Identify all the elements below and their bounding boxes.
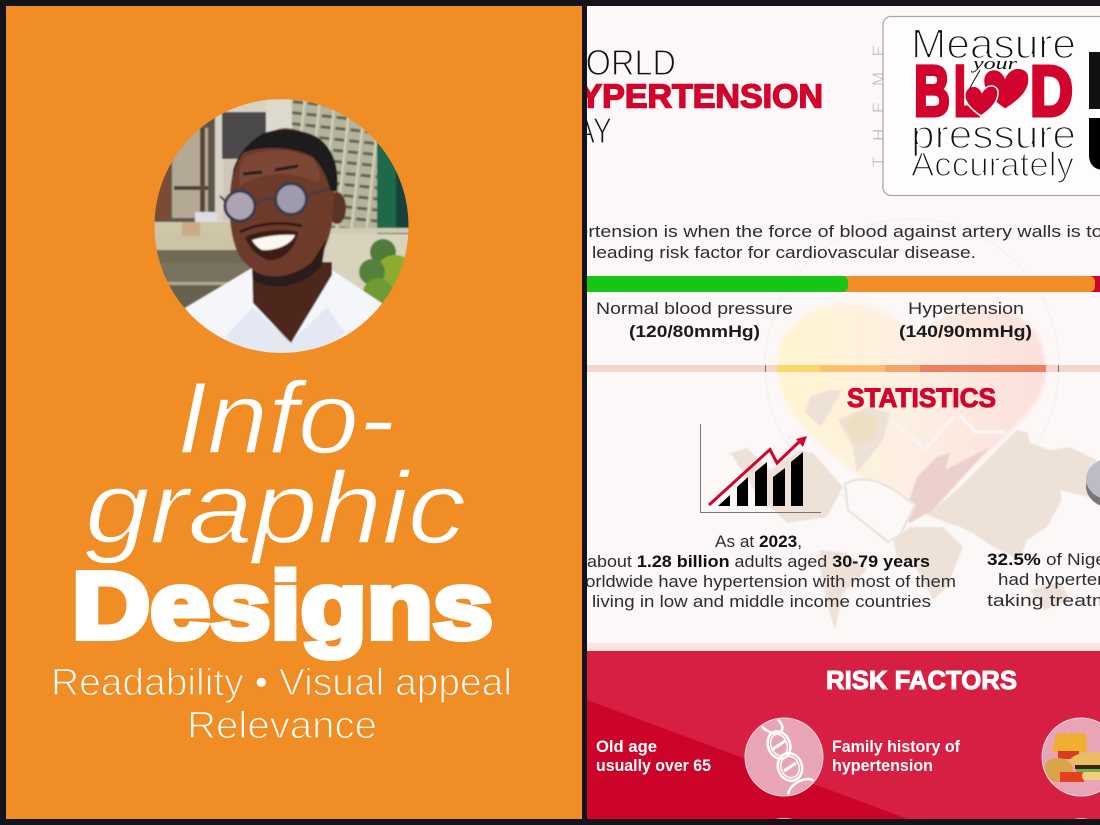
label: vertical THEME: THEME bbox=[869, 45, 888, 167]
text: Measure: Measure bbox=[911, 20, 1076, 67]
heading: World Hypertension Day: HYPERTENSION bbox=[555, 78, 823, 114]
subheading: Relevance: Relevance bbox=[187, 705, 377, 747]
scale label: hypertension: Hypertension bbox=[908, 299, 1024, 318]
icon: DNA helix bbox=[744, 718, 824, 796]
risk: family history: hypertension bbox=[832, 757, 933, 775]
subheading: Readability and Visual appeal: Readability • Visual appeal bbox=[51, 662, 512, 704]
icon: partly visible grey pie bbox=[1086, 458, 1100, 508]
theme logo box bbox=[883, 16, 1100, 196]
risk: family history bbox=[832, 738, 960, 775]
definition text bbox=[587, 225, 1100, 262]
risk: family history: Family history of bbox=[832, 738, 960, 756]
watermark: heart and world map bbox=[730, 303, 1098, 629]
scale label: normal: Normal blood pressure bbox=[596, 299, 793, 318]
risk: old age: usually over 65 bbox=[596, 757, 711, 775]
heading: Statistics: STATISTICS bbox=[847, 383, 996, 413]
text: pressure: pressure bbox=[911, 113, 1076, 157]
definition text: leading risk factor for cardiovascular disease. bbox=[592, 243, 976, 262]
logo word: Blood with hearts: your bbox=[970, 54, 1018, 73]
text: worldwide statistic: worldwide have hypertension with most of them bbox=[571, 572, 956, 591]
photo: smiling man in round crop bbox=[154, 99, 415, 360]
text: worldwide statistic bbox=[571, 532, 956, 611]
heading: World Hypertension Day: DAY bbox=[555, 110, 612, 151]
definition text: It is a bbox=[545, 243, 587, 262]
text: worldwide statistic: about 1.28 billion adults aged 30-79 years bbox=[587, 552, 930, 571]
icon: rising bar chart bbox=[700, 424, 821, 512]
partly visible black badge bbox=[1089, 52, 1100, 170]
text: Accurately: Accurately bbox=[911, 146, 1074, 184]
heading: Designs: Designs bbox=[72, 553, 493, 659]
logo word: Blood with hearts bbox=[916, 61, 1072, 118]
panel: risk factors bbox=[587, 643, 1100, 822]
risk: old age bbox=[596, 738, 711, 775]
logo word: Blood with hearts: B bbox=[914, 52, 950, 132]
heading: Risk Factors: RISK FACTORS bbox=[826, 665, 1017, 695]
logo word: Blood with hearts: D bbox=[1030, 52, 1073, 132]
text: worldwide statistic: living in low and middle income countries bbox=[592, 592, 931, 611]
scale label: normal: (120/80mmHg) bbox=[629, 322, 760, 341]
icon: fast food bbox=[1042, 718, 1100, 796]
heading: graphic: graphic bbox=[85, 451, 466, 565]
text: Nigeria statistic bbox=[987, 550, 1100, 610]
definition text: Hypertension is when the force of blood against artery walls is too high. bbox=[542, 222, 1100, 241]
heading: Info-: Info- bbox=[177, 361, 395, 475]
logo word: Blood with hearts: L bbox=[954, 52, 980, 132]
blood pressure scale bar bbox=[560, 276, 1100, 292]
scale label: hypertension: (140/90mmHg) bbox=[899, 322, 1032, 341]
text: worldwide statistic: As at 2023, bbox=[715, 532, 802, 551]
scale label: hypertension bbox=[899, 299, 1032, 341]
risk: old age: Old age bbox=[596, 738, 657, 756]
heading: World Hypertension Day: WORLD bbox=[555, 42, 676, 83]
next row icons, cropped at the bottom edge bbox=[776, 818, 1088, 819]
panel: orange title card bbox=[6, 6, 582, 819]
panel: hypertension infographic poster bbox=[542, 6, 1100, 822]
divider band bbox=[587, 365, 1100, 372]
scale label: normal bbox=[596, 299, 793, 341]
heading: World Hypertension Day bbox=[587, 50, 822, 142]
